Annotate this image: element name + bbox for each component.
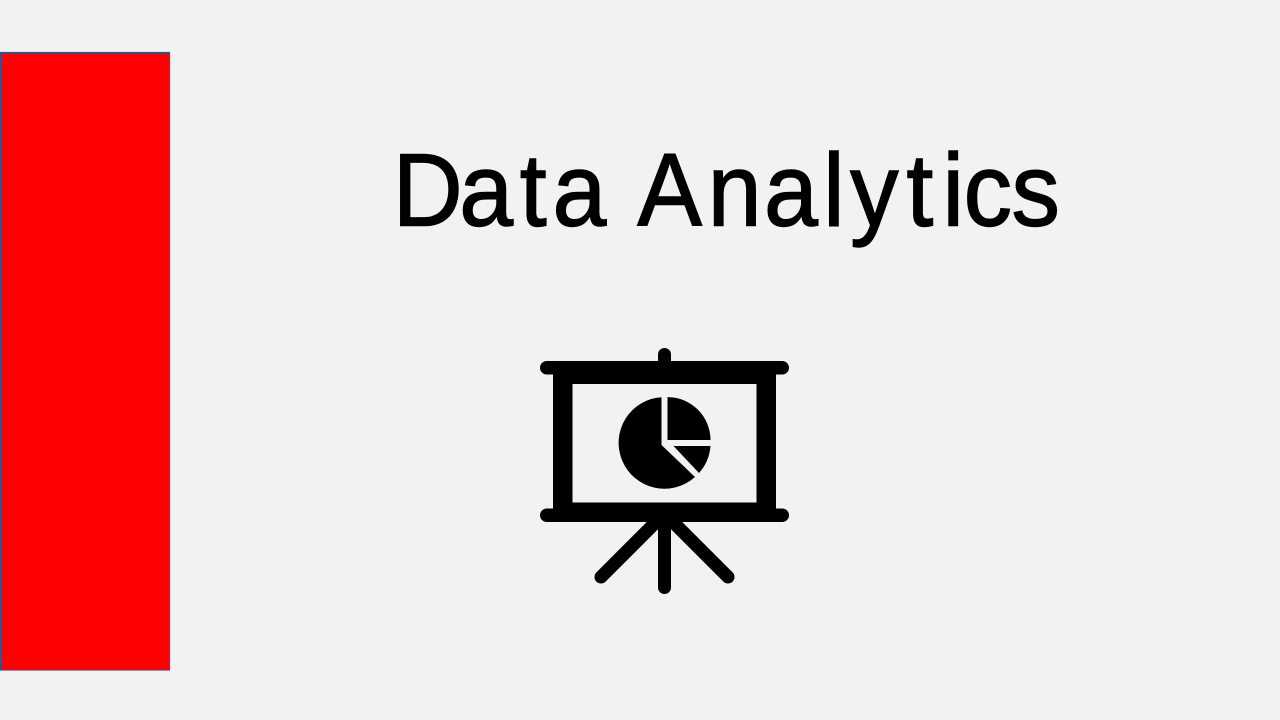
icon: tripod legs bbox=[601, 515, 728, 588]
chart: pie bbox=[619, 397, 710, 489]
icon: presentation screen with pie chart bbox=[540, 348, 789, 588]
panel: red sidebar bbox=[0, 52, 170, 670]
icon: screen top post bbox=[658, 348, 671, 372]
title: Data Analytics bbox=[393, 134, 1060, 248]
icon: bottom bar bbox=[540, 508, 789, 522]
icon: screen frame bbox=[553, 368, 776, 515]
icon: top bar bbox=[540, 361, 789, 374]
